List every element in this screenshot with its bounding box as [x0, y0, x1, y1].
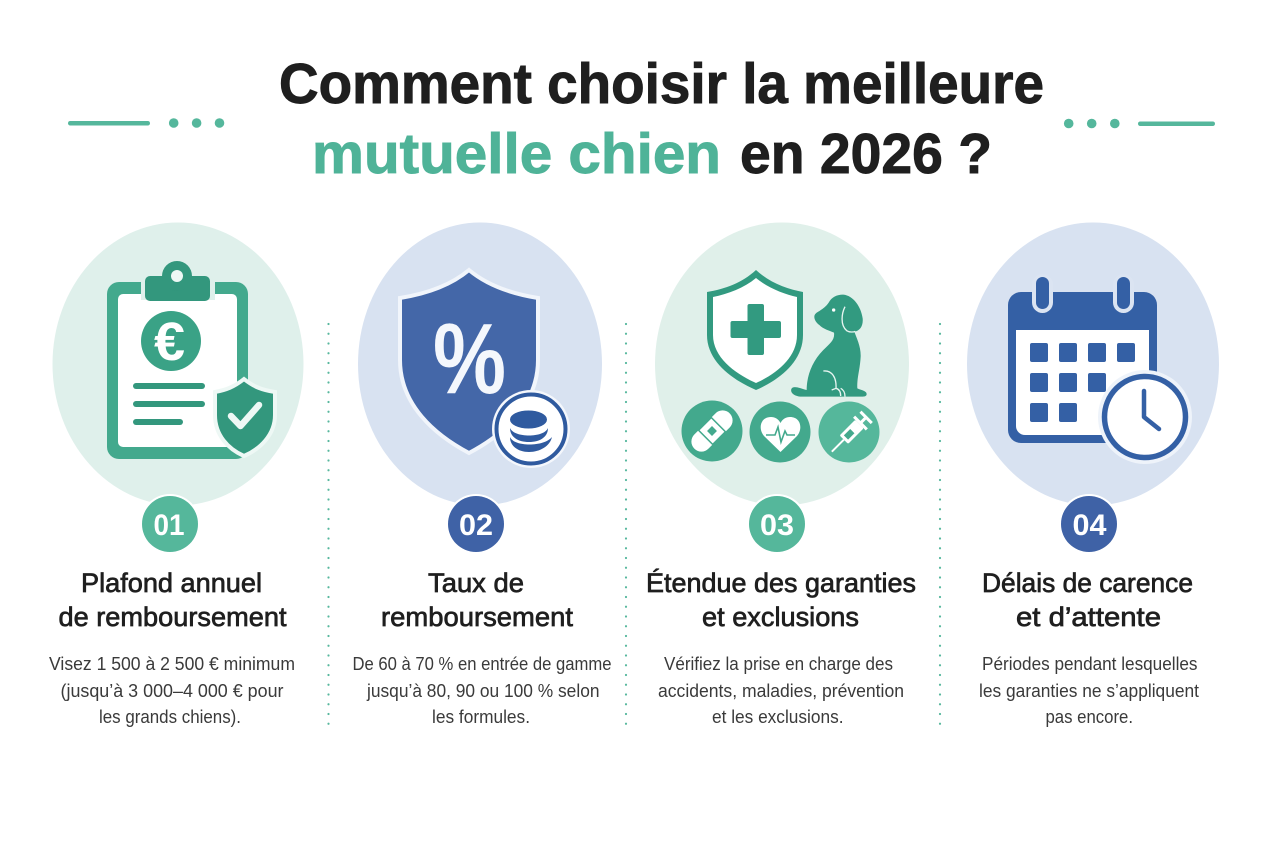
badge 01	[140, 494, 200, 554]
title: Comment choisir la meilleure	[279, 52, 1044, 116]
heading 2	[381, 568, 573, 632]
heading 4: Délais de carence	[982, 568, 1193, 598]
panel: étendue des garanties	[646, 222, 916, 727]
description 4: Périodes pendant lesquelles	[982, 653, 1198, 674]
icon: clipboard with euro and shield	[107, 261, 275, 459]
panel: plafond annuel	[49, 222, 304, 727]
panel: taux de remboursement	[352, 222, 612, 727]
description 4	[979, 653, 1199, 727]
description 1: Visez 1 500 à 2 500 € minimum	[49, 653, 295, 674]
badge 03: 03	[760, 509, 794, 542]
heading 3: Étendue des garanties	[646, 568, 916, 598]
heading 3: et exclusions	[702, 602, 859, 632]
badge 02: 02	[459, 509, 493, 542]
icon background 3	[655, 222, 909, 506]
heading 1	[58, 568, 287, 632]
icon background 1	[52, 222, 304, 506]
icon background 2	[358, 222, 602, 506]
icon: shield with percent and coins: %	[433, 303, 506, 415]
heading 1: de remboursement	[58, 602, 287, 632]
icon: shield with percent and coins	[400, 270, 570, 468]
description 3: accidents, maladies, prévention	[658, 680, 904, 701]
badge 04	[1059, 494, 1119, 554]
badge 01: 01	[154, 509, 184, 542]
description 2: les formules.	[432, 706, 530, 727]
icon: dog	[791, 295, 867, 397]
description 2: jusqu’à 80, 90 ou 100 % selon	[366, 680, 600, 701]
icon: calendar with clock	[1008, 274, 1192, 464]
icon background 4	[967, 222, 1219, 506]
description 2	[352, 653, 612, 727]
icon: syringe	[818, 402, 880, 462]
title: mutuelle chien	[312, 122, 721, 186]
description 3	[658, 653, 904, 727]
badge 03	[747, 494, 807, 554]
description 1: les grands chiens).	[99, 706, 241, 727]
badge 02	[446, 494, 506, 554]
heading 2: Taux de	[428, 568, 524, 598]
description 2: De 60 à 70 % en entrée de gamme	[352, 653, 612, 674]
description 1: (jusqu’à 3 000–4 000 € pour	[60, 680, 284, 701]
description 3: et les exclusions.	[712, 706, 844, 727]
heading 4: et d’attente	[1016, 602, 1161, 632]
icon: shield with cross, dog and care icons	[682, 270, 880, 462]
panel: délais de carence	[967, 222, 1219, 727]
icon: bandage	[682, 400, 742, 462]
heading 4	[982, 568, 1193, 632]
title: en 2026 ?	[740, 122, 992, 186]
title ornament right	[1064, 119, 1215, 128]
heading 1: Plafond annuel	[81, 568, 262, 598]
icon: clipboard with euro and shield: €	[154, 312, 185, 372]
badge 04: 04	[1072, 509, 1107, 542]
heading 3	[646, 568, 916, 632]
icon: heart with pulse	[750, 402, 810, 462]
title ornament left	[68, 118, 224, 128]
description 3: Vérifiez la prise en charge des	[664, 653, 893, 674]
description 4: pas encore.	[1046, 706, 1133, 727]
heading 2: remboursement	[381, 602, 573, 632]
title	[279, 52, 1044, 186]
description 1	[49, 653, 295, 727]
description 4: les garanties ne s’appliquent	[979, 680, 1199, 701]
